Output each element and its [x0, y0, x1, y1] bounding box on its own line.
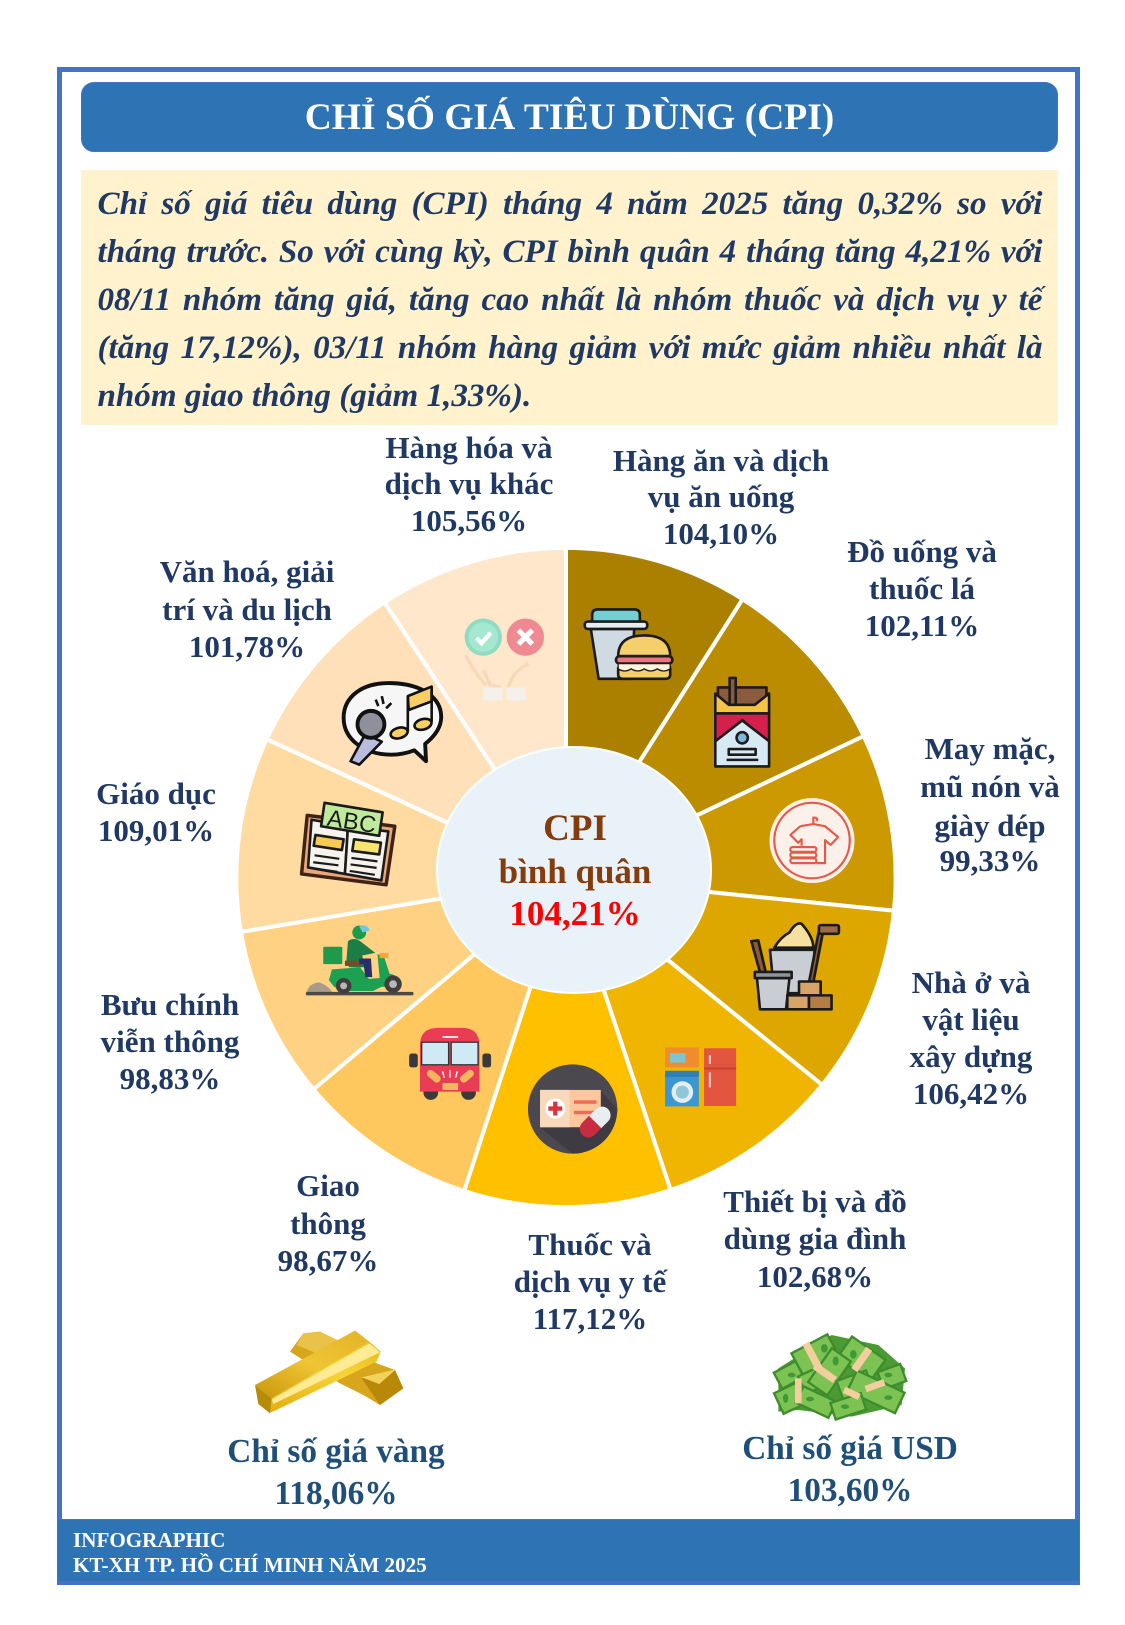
label: clothing: May mặc,: [925, 731, 1055, 766]
label: gold index: [227, 1433, 445, 1512]
center label: bình quân: [499, 852, 651, 891]
title banner: [81, 82, 1058, 152]
intro text block: Chỉ số giá tiêu dùng (CPI) tháng 4 năm 2025 tăng 0,32% so với: [98, 186, 1042, 222]
label: culture: 101,78%: [189, 629, 305, 664]
icon: food and drink: [585, 609, 672, 679]
icon: bus: [409, 1028, 491, 1100]
label: culture: Văn hoá, giải: [160, 554, 335, 589]
footer band: INFOGRAPHIC: [73, 1528, 225, 1552]
footer band: KT-XH TP. HỒ CHÍ MINH NĂM 2025: [73, 1553, 427, 1577]
label: household appliances: [723, 1184, 907, 1294]
label: housing: xây dựng: [910, 1039, 1033, 1074]
label: post and telecom: [101, 987, 240, 1096]
label: medicine: [514, 1227, 668, 1336]
label: other goods: dịch vụ khác: [385, 466, 553, 501]
icon: money pile: [774, 1334, 906, 1420]
label: food: [613, 443, 829, 551]
label: other goods: 105,56%: [411, 503, 527, 538]
label: food: 104,10%: [663, 516, 779, 551]
label: housing: Nhà ở và: [912, 965, 1031, 1000]
label: other goods: [385, 430, 553, 538]
label: USD index: 103,60%: [788, 1472, 912, 1509]
icon: construction materials: [751, 923, 839, 1009]
label: household appliances: dùng gia đình: [724, 1221, 906, 1256]
label: clothing: 99,33%: [940, 843, 1040, 878]
label: housing: 106,42%: [913, 1076, 1029, 1111]
icon: cigarettes: [715, 678, 769, 766]
label: other goods: Hàng hóa và: [385, 430, 553, 465]
center label: [499, 808, 651, 933]
label: housing: vật liệu: [922, 1002, 1020, 1037]
label: gold index: Chỉ số giá vàng: [227, 1433, 445, 1470]
label: education: 109,01%: [98, 813, 214, 848]
label: clothing: giày dép: [934, 808, 1046, 843]
label: beverages and tobacco: Đồ uống và: [847, 534, 997, 569]
icon: microphone and music: [344, 683, 441, 765]
label: gold index: 118,06%: [274, 1475, 398, 1512]
label: post and telecom: Bưu chính: [101, 987, 239, 1022]
label: post and telecom: 98,83%: [120, 1061, 220, 1096]
label: USD index: Chỉ số giá USD: [742, 1430, 958, 1467]
label: USD index: [742, 1430, 958, 1509]
icon: medicine: [528, 1064, 617, 1154]
label: transport: [278, 1168, 378, 1278]
label: medicine: 117,12%: [533, 1301, 647, 1336]
icon: ABC book: [302, 803, 395, 885]
label: food: Hàng ăn và dịch: [613, 443, 829, 478]
label: education: Giáo dục: [96, 776, 216, 811]
icon: home appliances: [665, 1047, 736, 1106]
icon: check and cross hands: [465, 618, 544, 700]
label: medicine: dịch vụ y tế: [514, 1264, 668, 1299]
label: medicine: Thuốc và: [528, 1227, 652, 1262]
label: education: [96, 776, 216, 848]
icon: ABC book: ABC: [325, 805, 378, 838]
intro text block: (tăng 17,12%), 03/11 nhóm hàng giảm với mức giảm nhiều nhất là: [98, 330, 1042, 366]
label: beverages and tobacco: 102,11%: [865, 608, 979, 643]
label: transport: 98,67%: [278, 1243, 378, 1278]
label: clothing: mũ nón và: [920, 769, 1060, 804]
label: beverages and tobacco: thuốc lá: [869, 571, 975, 606]
title banner: CHỈ SỐ GIÁ TIÊU DÙNG (CPI): [305, 97, 834, 138]
intro text block: tháng trước. So với cùng kỳ, CPI bình quân 4 tháng tăng 4,21% với: [98, 234, 1042, 270]
icon: clothes: [770, 798, 855, 883]
intro text block: nhóm giao thông (giảm 1,33%).: [98, 378, 531, 414]
label: beverages and tobacco: [847, 534, 997, 643]
label: culture: [160, 554, 335, 664]
label: post and telecom: viễn thông: [101, 1024, 240, 1059]
label: household appliances: Thiết bị và đồ: [723, 1184, 907, 1219]
icon: delivery scooter: [306, 925, 413, 995]
label: transport: thông: [290, 1206, 366, 1241]
pie chart: [236, 548, 896, 1207]
label: clothing: [920, 731, 1060, 878]
label: food: vụ ăn uống: [648, 479, 795, 514]
intro text block: [81, 170, 1058, 425]
label: housing: [910, 965, 1033, 1111]
center label: 104,21%: [509, 894, 641, 933]
center circle: [437, 747, 711, 993]
label: culture: trí và du lịch: [162, 592, 332, 627]
center label: CPI: [543, 808, 607, 849]
label: household appliances: 102,68%: [757, 1259, 873, 1294]
icon: gold bars: [255, 1331, 403, 1413]
footer band: [57, 1519, 1080, 1585]
label: transport: Giao: [296, 1168, 360, 1203]
intro text block: 08/11 nhóm tăng giá, tăng cao nhất là nhóm thuốc và dịch vụ y tế: [98, 282, 1042, 318]
